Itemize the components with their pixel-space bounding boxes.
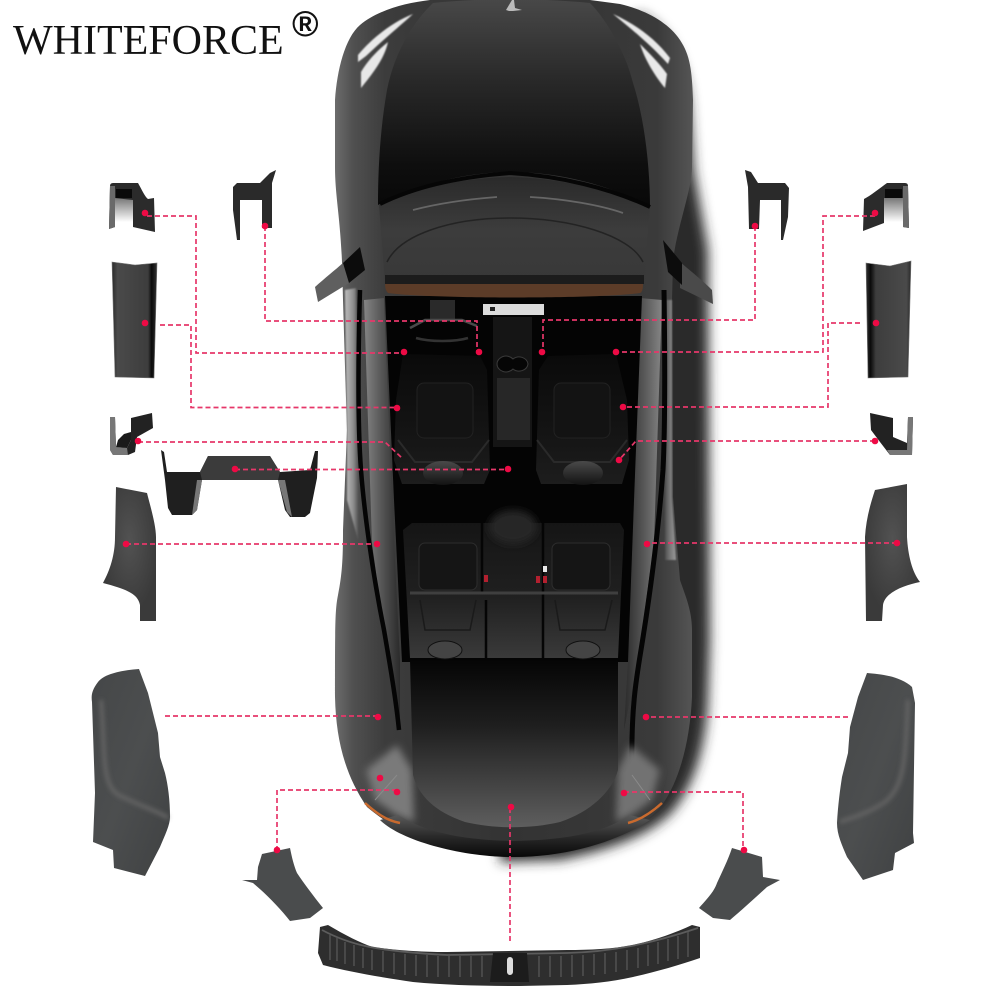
roof arc bbox=[387, 218, 643, 262]
rear quarter right highlight bbox=[616, 745, 660, 822]
part: rear bumper sill bbox=[318, 925, 700, 986]
leader: right corner trim bbox=[621, 790, 747, 853]
right door sill bbox=[624, 298, 662, 730]
car shadow bbox=[500, 14, 710, 862]
center latch bbox=[490, 953, 529, 982]
leader: left long panel bbox=[142, 320, 400, 411]
leader: upper right clip bbox=[613, 210, 878, 355]
part: upper right clip bbox=[863, 183, 909, 231]
hood emblem bbox=[506, 0, 522, 11]
part: right long panel bbox=[866, 261, 911, 378]
leader: upper left hook bbox=[262, 223, 482, 355]
front right seat bbox=[536, 354, 629, 485]
bumper ridges bbox=[330, 932, 688, 977]
right mirror bbox=[663, 240, 713, 304]
steering wheel bbox=[410, 300, 477, 341]
leader: upper right hook bbox=[539, 223, 758, 355]
right outer light band bbox=[664, 300, 676, 560]
leader: rear bumper sill bbox=[508, 804, 514, 942]
part: right pillar trim bbox=[865, 484, 920, 621]
center screen bbox=[483, 304, 544, 315]
right tail light bbox=[628, 803, 662, 823]
left tail light bbox=[365, 803, 400, 823]
leader lines bbox=[123, 210, 900, 942]
rear lower band bbox=[380, 815, 650, 857]
rear bench bbox=[403, 510, 624, 659]
wipers bbox=[380, 173, 650, 207]
part: upper left hook bbox=[233, 170, 276, 240]
part: upper left clip bbox=[109, 183, 155, 232]
trunk lid bbox=[410, 660, 618, 827]
leader: under-seat tray bbox=[232, 466, 511, 472]
windshield bbox=[379, 177, 650, 282]
part: right rear quarter panel bbox=[837, 673, 915, 880]
part: lower right clip bbox=[870, 413, 913, 455]
part: upper right hook bbox=[745, 170, 789, 240]
part: left rear quarter panel bbox=[92, 669, 170, 876]
cowl bbox=[385, 275, 644, 284]
leader: left pillar trim bbox=[123, 541, 380, 547]
left mirror bbox=[315, 247, 365, 302]
left door sill bbox=[364, 298, 400, 730]
leader: right long panel bbox=[620, 320, 879, 410]
leader: lower right clip bbox=[616, 438, 878, 463]
left headlight bbox=[358, 14, 413, 88]
left outer light band bbox=[345, 288, 359, 540]
part: under-seat tray bbox=[161, 450, 318, 517]
stray marker dot bbox=[377, 775, 383, 781]
leader: left corner trim bbox=[274, 789, 400, 853]
leader: left rear quarter panel bbox=[165, 714, 381, 720]
center console bbox=[493, 317, 532, 447]
leader: lower left clip bbox=[135, 438, 402, 458]
leader: right rear quarter panel bbox=[643, 714, 848, 720]
wordmark: WHITEFORCE bbox=[13, 18, 284, 64]
hood bbox=[378, 0, 650, 207]
dashboard trim bbox=[385, 284, 643, 298]
leader: upper left clip bbox=[142, 210, 407, 355]
registered mark: ® bbox=[292, 3, 319, 44]
left black channel bbox=[359, 290, 399, 730]
part: left long panel bbox=[112, 262, 157, 378]
front left seat bbox=[394, 354, 490, 485]
right headlight bbox=[613, 14, 670, 88]
cabin interior bbox=[385, 296, 642, 662]
seat belt buckles bbox=[484, 566, 547, 583]
car top view bbox=[315, 0, 713, 857]
brand title bbox=[13, 3, 319, 64]
rear quarter left highlight bbox=[366, 745, 414, 822]
leader: right pillar trim bbox=[644, 540, 900, 547]
right black channel bbox=[632, 290, 665, 767]
tail crease lines bbox=[375, 775, 650, 800]
part: left pillar trim bbox=[103, 487, 156, 621]
part: right corner trim bbox=[699, 848, 780, 920]
part: left corner trim bbox=[242, 848, 323, 921]
windshield highlights bbox=[413, 197, 623, 213]
car body bbox=[335, 0, 693, 857]
part: lower left clip bbox=[110, 413, 153, 455]
